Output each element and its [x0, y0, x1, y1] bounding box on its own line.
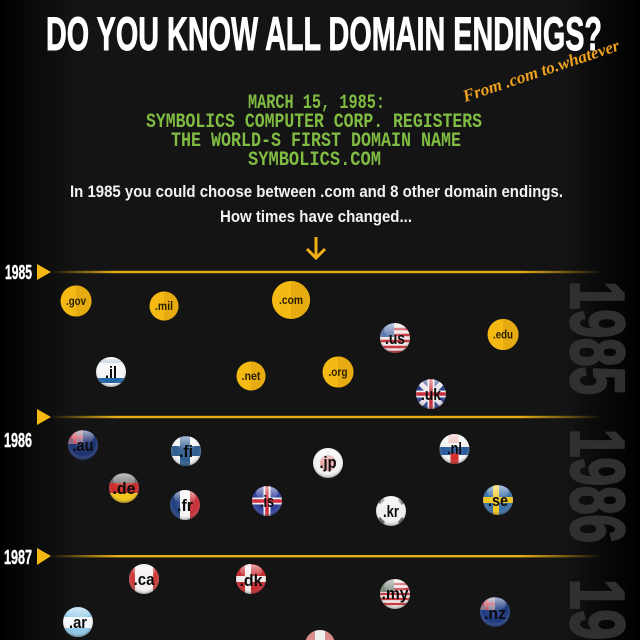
flag .uk: [416, 379, 446, 409]
bubble .mil: .mil: [155, 299, 173, 313]
flag .dk: [236, 564, 266, 594]
flag .fi: [171, 436, 201, 466]
bubble .edu: .edu: [493, 328, 513, 342]
flag .au: .au: [72, 436, 94, 455]
intro text: [70, 183, 563, 226]
green headline text: [146, 92, 482, 172]
vertical year 1985: 1985: [554, 281, 639, 395]
flag .ca: .ca: [134, 570, 155, 589]
flag partially cropped at bottom: [305, 630, 335, 640]
flag .dk: .dk: [240, 571, 263, 590]
flag .nl: .nl: [447, 439, 462, 458]
timeline 1985: [5, 262, 602, 284]
green headline text: SYMBOLICS COMPUTER CORP. REGISTERS: [146, 111, 482, 134]
bubble .org: [322, 356, 354, 388]
bubble .net: .net: [242, 369, 260, 383]
vertical year 1986: 1986: [554, 429, 639, 543]
flag .se: [483, 485, 513, 515]
arrow down: [307, 237, 325, 258]
bubble .gov: .gov: [66, 294, 86, 308]
intro text: How times have changed...: [220, 208, 412, 226]
flag .fi: .fi: [179, 442, 193, 461]
flag .jp: [313, 448, 343, 478]
flag .is: .is: [260, 492, 274, 511]
flag .kr: .kr: [383, 502, 399, 521]
flag .jp: .jp: [320, 453, 336, 472]
flag .au: [68, 430, 98, 460]
bubble .com: .com: [279, 293, 303, 307]
timeline 1987: 1987: [4, 547, 32, 569]
bubble .net: [236, 362, 266, 390]
flag .nz: [480, 597, 510, 627]
flag .de: [109, 473, 139, 503]
flag .nz: .nz: [484, 604, 506, 623]
timeline 1985: 1985: [5, 262, 32, 284]
bubble .gov: [60, 286, 92, 316]
green headline text: THE WORLD-S FIRST DOMAIN NAME: [171, 130, 461, 153]
subtitle: from .com to .whatever: From .com to.whatever: [459, 36, 622, 106]
timeline 1986: 1986: [4, 430, 32, 452]
flag .fr: .fr: [177, 496, 193, 515]
intro text: In 1985 you could choose between .com and 8 other domain endings.: [70, 183, 563, 201]
timeline 1987: [4, 547, 602, 569]
flag .kr: [376, 496, 406, 526]
flag .se: .se: [488, 491, 508, 510]
flag .my: .my: [382, 584, 409, 603]
timeline 1986: [4, 409, 602, 452]
flag .ca: [129, 564, 159, 594]
flag .us: [380, 323, 410, 353]
green headline text: SYMBOLICS.COM: [248, 149, 381, 172]
bubble .org: .org: [328, 365, 348, 379]
flag .uk: .uk: [421, 385, 441, 404]
flag .ar: [63, 607, 93, 637]
flag .my: [380, 579, 410, 609]
flag .us: .us: [385, 329, 405, 348]
flag .il: [96, 357, 126, 387]
bubble .edu: [488, 319, 518, 350]
flag .is: [252, 486, 282, 516]
bubble .mil: [150, 292, 178, 320]
flag .de: .de: [112, 479, 136, 498]
green headline text: MARCH 15, 1985:: [248, 92, 385, 115]
flag .il: .il: [105, 363, 117, 382]
flag .fr: [170, 490, 200, 520]
bubble .com: [272, 281, 310, 319]
flag .nl: [440, 434, 470, 464]
flag .ar: .ar: [69, 613, 87, 632]
